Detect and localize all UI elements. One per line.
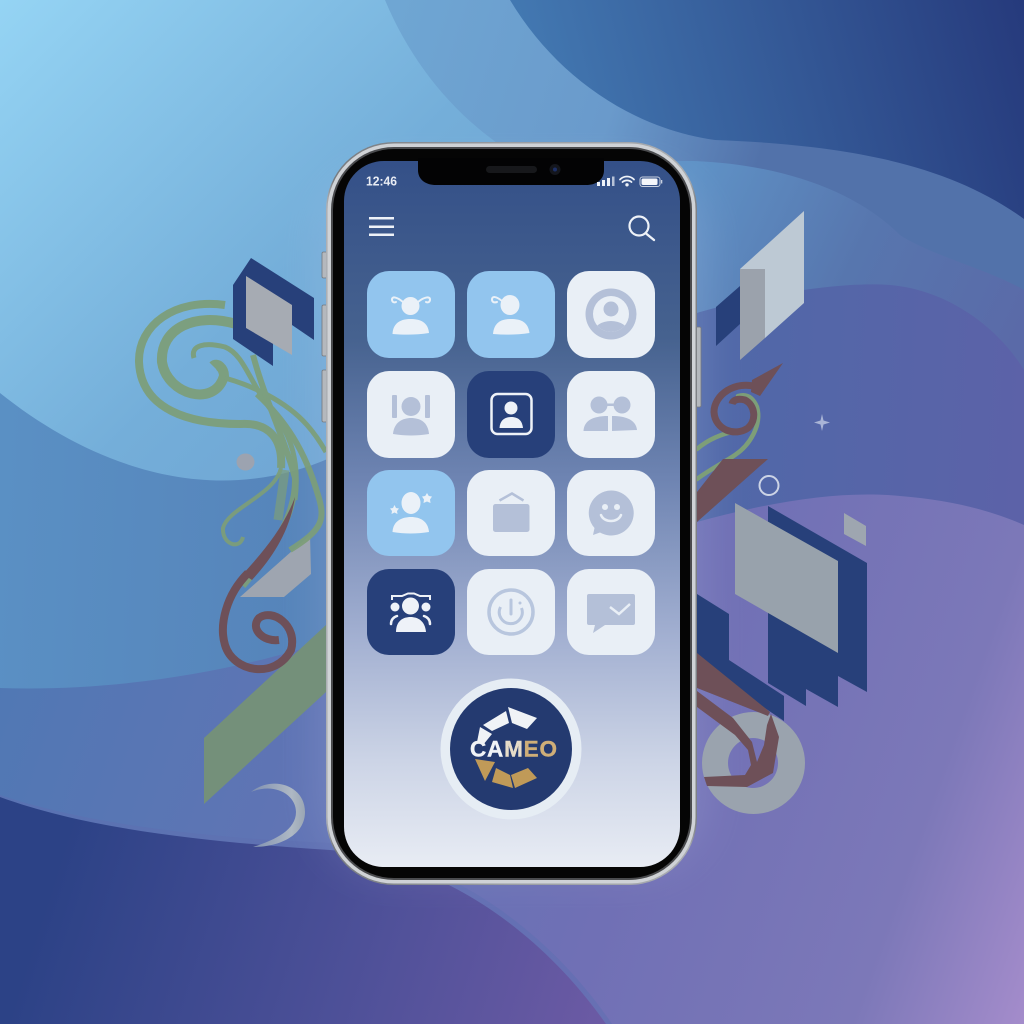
app tile: message check <box>567 569 655 655</box>
app tile: power smile <box>467 569 555 655</box>
logo upper arc pieces <box>477 707 537 745</box>
maroon spiral <box>714 363 783 432</box>
left decorative shapes <box>139 258 326 847</box>
blue staggered block <box>768 506 867 707</box>
speaker <box>486 166 537 173</box>
app tile: smile chat <box>567 470 655 556</box>
grey crescent <box>251 784 305 847</box>
maroon wedge <box>697 459 768 522</box>
status time: 12:46 <box>366 174 397 188</box>
app tile: profile with ribbon <box>467 271 555 358</box>
app tile: avatar ring <box>567 271 655 358</box>
logo wordmark: CAMEO <box>470 736 557 762</box>
grey dot <box>236 454 254 470</box>
green vine <box>697 395 758 479</box>
small ring <box>760 476 778 495</box>
right decorative shapes <box>697 211 867 814</box>
sparkle <box>814 414 830 431</box>
app tile: group, selected <box>367 569 455 655</box>
blue left block <box>697 594 784 721</box>
search icon <box>630 216 654 240</box>
app tile: connected people <box>567 371 655 458</box>
status battery <box>640 177 662 186</box>
grey block <box>246 276 292 355</box>
app tile: box <box>467 470 555 556</box>
app tile: profile with horns <box>367 271 455 358</box>
phone <box>322 142 701 885</box>
maroon swirl <box>223 497 295 669</box>
app tile: profile with stars <box>367 470 455 556</box>
status wifi <box>620 176 634 186</box>
small grey panel <box>844 513 866 546</box>
maroon hook <box>697 653 779 787</box>
green ribbon <box>204 625 326 804</box>
phone glow <box>320 170 705 870</box>
camera <box>550 164 560 175</box>
side buttons <box>322 252 701 422</box>
menu icon <box>369 217 394 236</box>
logo lower arc pieces <box>475 759 537 788</box>
blue block <box>233 258 314 366</box>
logo disc <box>440 678 582 820</box>
screen <box>344 161 680 867</box>
blue back panel <box>716 286 740 346</box>
green vines <box>139 304 326 586</box>
grey ring <box>702 712 805 814</box>
notch <box>418 158 604 185</box>
phone body <box>326 142 697 885</box>
app tile: portrait bars <box>367 371 455 458</box>
status signal <box>597 176 614 186</box>
grey big panel <box>735 503 838 653</box>
light panel <box>740 211 804 338</box>
grey panel <box>740 269 765 360</box>
app tile: framed profile, selected <box>467 371 555 458</box>
grey wedge <box>240 535 311 597</box>
cameo logo <box>440 678 582 820</box>
